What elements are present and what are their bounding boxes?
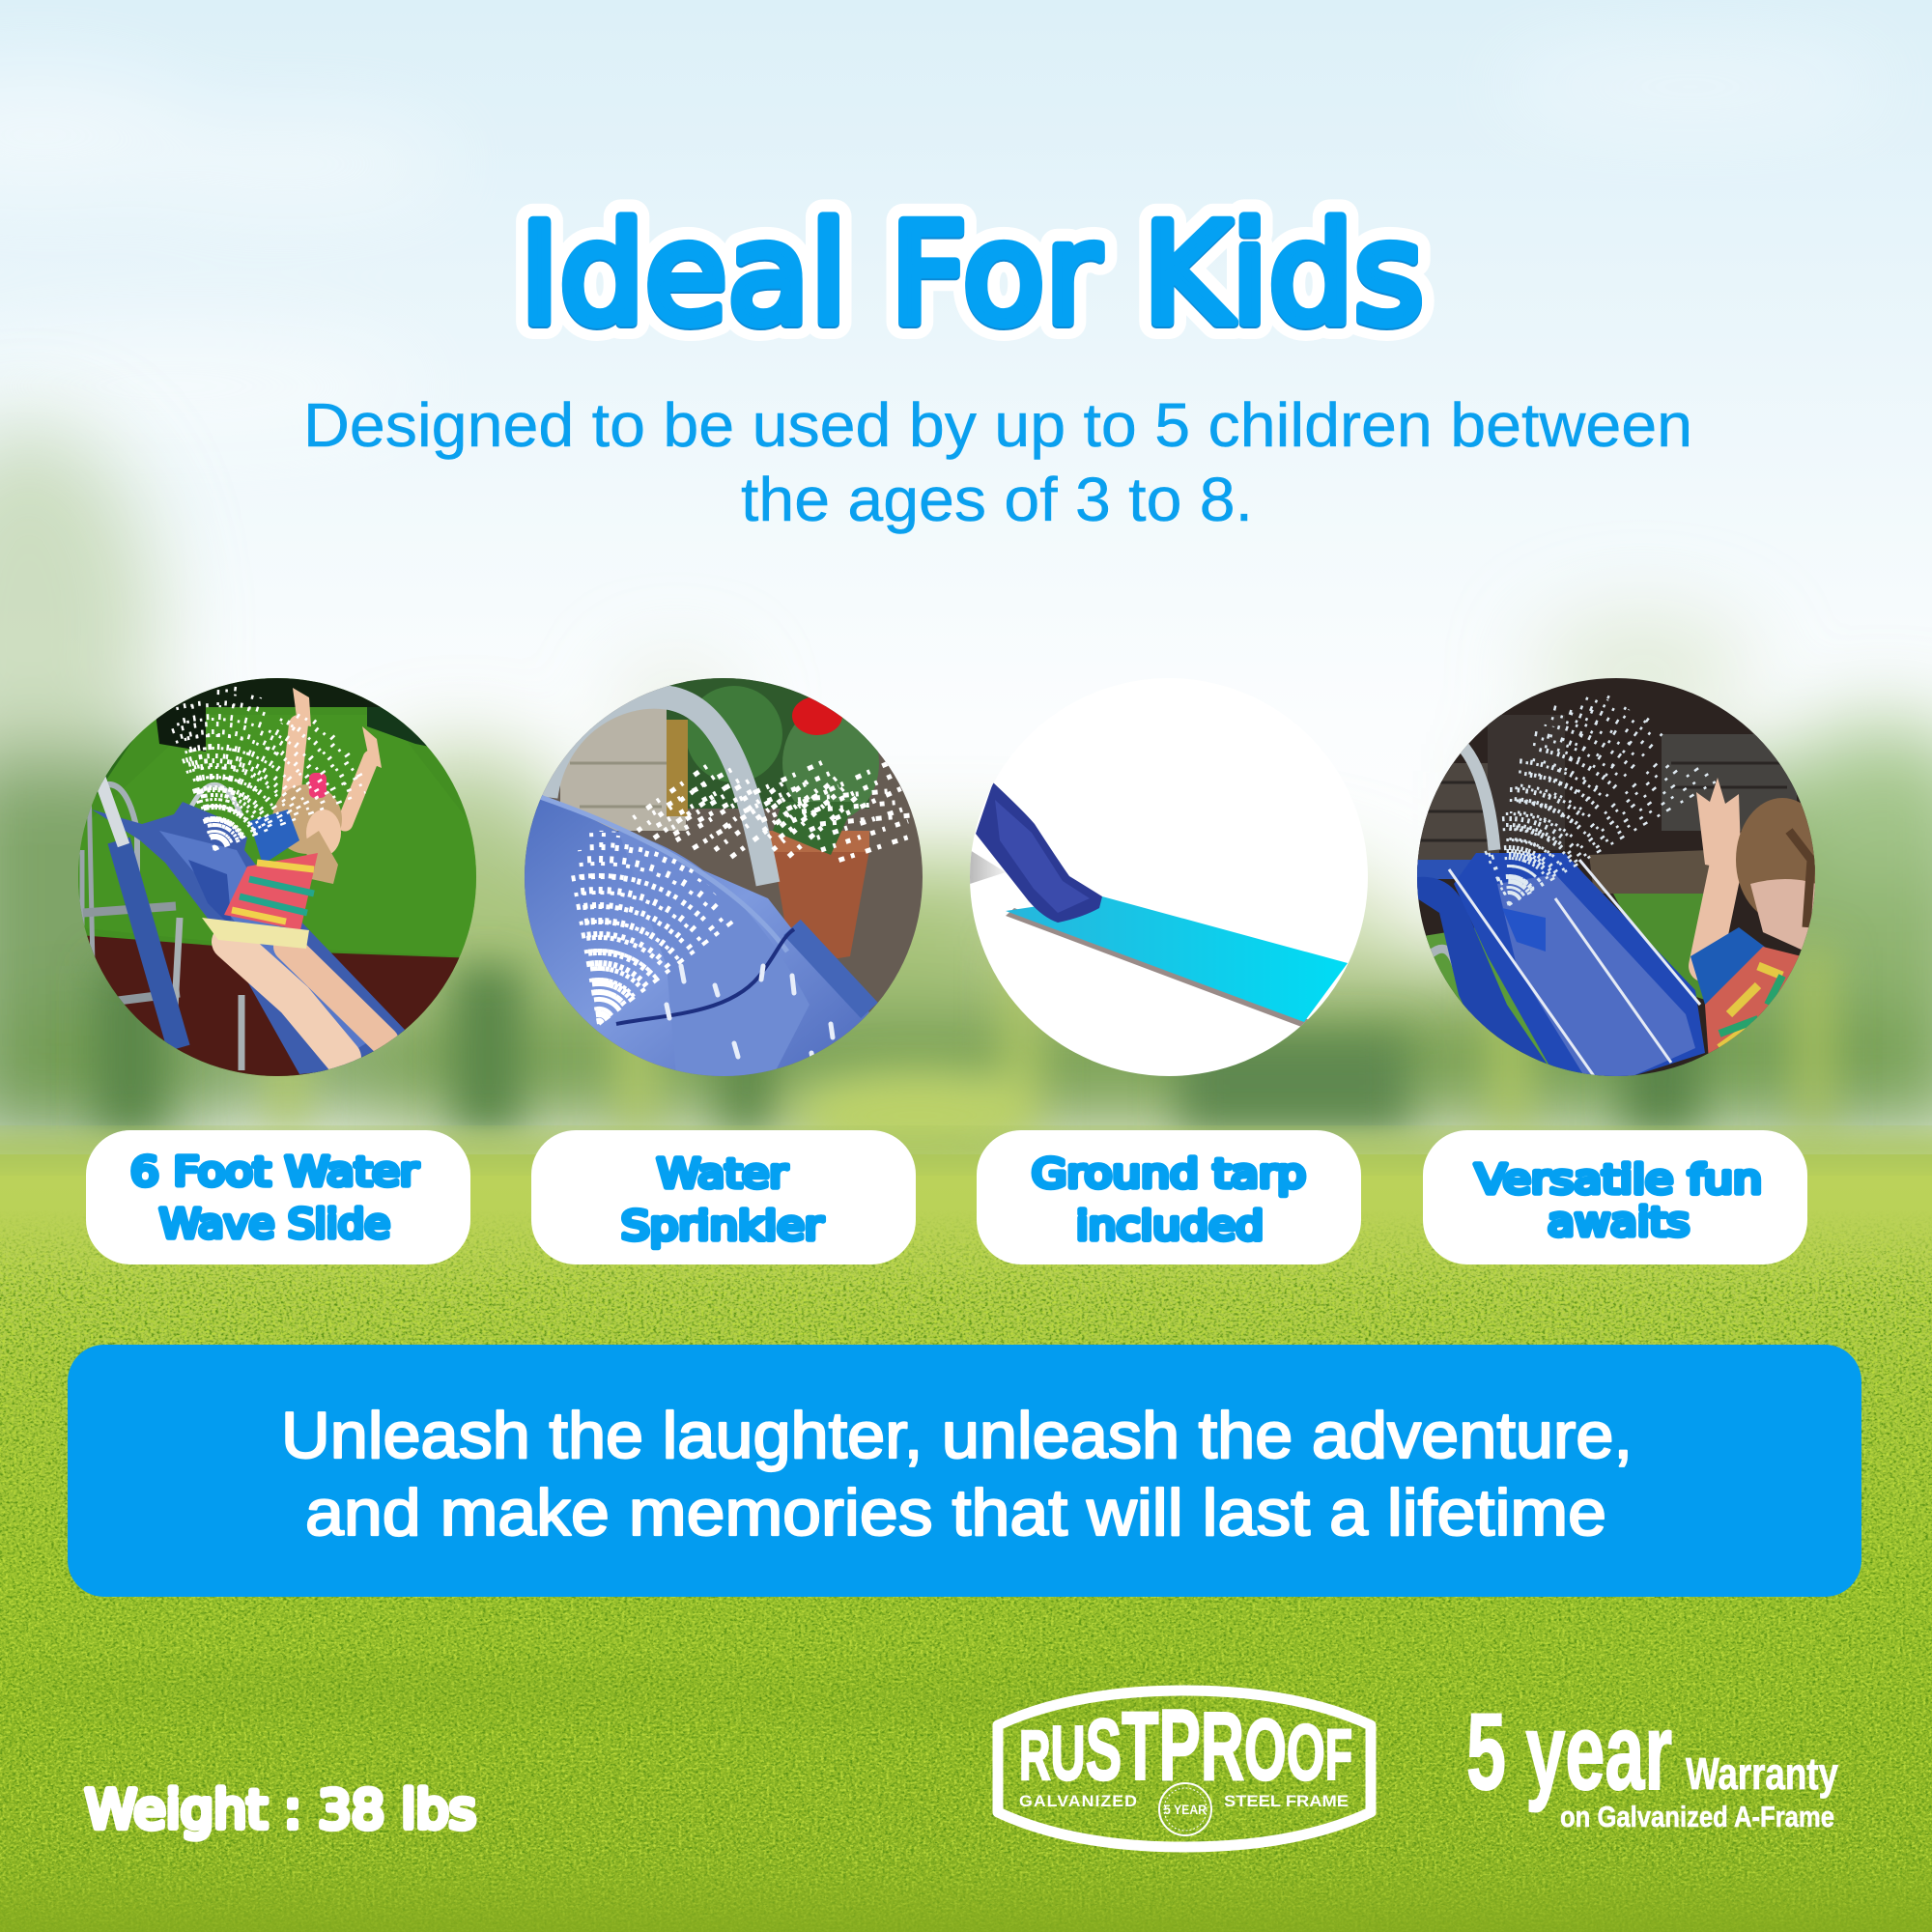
warranty text: on Galvanized A-Frame	[1560, 1800, 1834, 1833]
banner: tagline: Unleash the laughter, unleash the adventure,	[281, 1399, 1633, 1472]
label pill: Ground tarp included	[977, 1130, 1361, 1264]
badge: rustproof galvanized steel frame: GALVANIZED	[1019, 1792, 1138, 1810]
label pill: Water Sprinkler	[531, 1130, 916, 1264]
badge: rustproof galvanized steel frame: 5 YEAR	[1164, 1802, 1207, 1817]
title: Ideal For Kids: Ideal For Kids	[520, 193, 1424, 355]
subtitle text: Designed to be used by up to 5 children between	[303, 390, 1692, 460]
label pill: Water Sprinkler: Sprinkler	[621, 1203, 823, 1249]
label pill: Ground tarp included: included	[1076, 1203, 1264, 1249]
subtitle text	[303, 390, 1692, 534]
label pill: Versatile fun awaits: awaits	[1548, 1199, 1690, 1245]
photo: water sprinkler close-up	[525, 678, 923, 1076]
weight label: Weight : 38 lbs	[85, 1779, 476, 1840]
label pill: Versatile fun awaits	[1423, 1130, 1807, 1264]
label pill: Ground tarp included: Ground tarp	[1032, 1151, 1306, 1197]
warranty text: Warranty	[1686, 1748, 1838, 1799]
label pill: 6 Foot Water Wave Slide: Wave Slide	[159, 1201, 390, 1247]
label pill: 6 Foot Water Wave Slide	[86, 1130, 470, 1264]
label pill: Versatile fun awaits: Versatile fun	[1475, 1156, 1762, 1203]
title: Ideal For Kids: Ideal For Kids	[520, 193, 1424, 355]
warranty text: 5 year	[1466, 1691, 1672, 1812]
photo: girl on water slide	[78, 678, 476, 1076]
photo: ground tarp with slide	[970, 782, 1368, 1076]
badge: rustproof galvanized steel frame	[998, 1690, 1371, 1847]
photo: girl beside sprinkler slide	[1417, 678, 1829, 1076]
badge: rustproof galvanized steel frame: RUSTPROOF	[1019, 1690, 1352, 1802]
title: Ideal For Kids: Ideal For Kids	[520, 195, 1424, 356]
banner: tagline	[68, 1345, 1861, 1597]
label pill: Water Sprinkler: Water	[657, 1151, 787, 1197]
badge: rustproof galvanized steel frame: STEEL FRAME	[1224, 1792, 1349, 1810]
subtitle text: the ages of 3 to 8.	[741, 465, 1253, 534]
banner: tagline: and make memories that will last a lifetime	[305, 1476, 1606, 1549]
label pill: 6 Foot Water Wave Slide: 6 Foot Water	[130, 1149, 418, 1195]
